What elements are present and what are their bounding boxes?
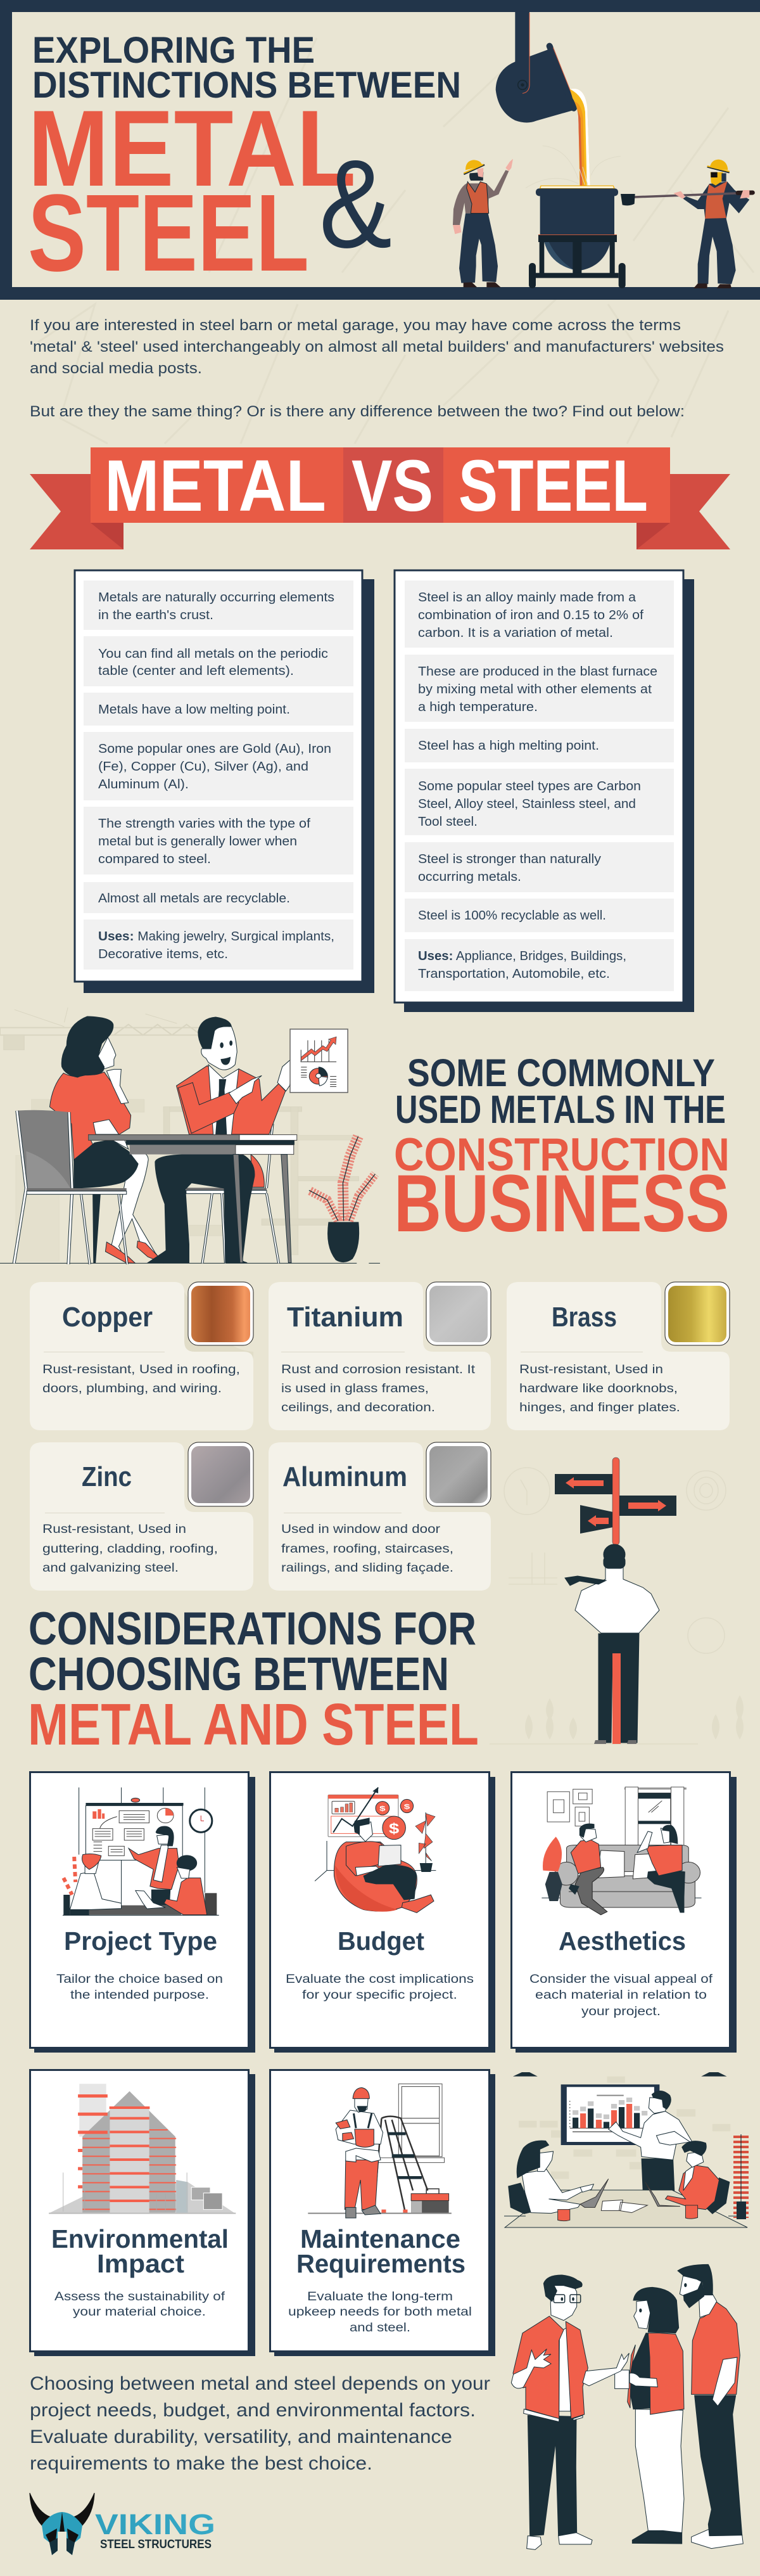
description [288, 2290, 472, 2335]
steel facts: Steel is stronger than naturally [418, 852, 601, 866]
card: brass: Brass [552, 1302, 617, 1333]
card: zinc: and galvanizing steel. [42, 1561, 179, 1575]
card: titanium: ceilings, and decoration. [281, 1401, 435, 1414]
card: project type [30, 1772, 255, 2053]
steel facts: a high temperature. [418, 700, 538, 714]
icon: man on beanbag: $ [379, 1805, 386, 1812]
steel facts: carbon. It is a variation of metal. [418, 626, 613, 640]
heading: commonly used metals [394, 1051, 730, 1249]
table [89, 1135, 297, 1263]
illustration: business meeting [0, 1008, 380, 1264]
metal facts: You can find all metals on the periodic [98, 647, 328, 661]
intro paragraph: If you are interested in steel barn or metal garage, you may have come across the terms [30, 317, 681, 334]
woman's chair [14, 1110, 127, 1264]
icon: viking helmet [30, 2493, 94, 2555]
card: aluminum: railings, and sliding façade. [281, 1561, 453, 1575]
intro text: 'metal' & 'steel' used interchangeably on almost all metal builders' and manufacturers' websites [30, 338, 724, 356]
presentation board [561, 2084, 659, 2145]
card: copper [30, 1282, 253, 1430]
description [529, 1973, 713, 2018]
metal facts: Uses: Making jewelry, Surgical implants, [98, 930, 334, 944]
office plant [737, 2134, 746, 2219]
description: Assess the sustainability of [54, 2290, 225, 2304]
title: Requirements [296, 2249, 466, 2278]
metal facts: (Fe), Copper (Cu), Silver (Ag), and [98, 760, 308, 774]
man [148, 1017, 293, 1263]
conclusion text: project needs, budget, and environmental factors. [30, 2400, 476, 2421]
heading line 1: SOME COMMONLY [407, 1051, 715, 1094]
potted plant [309, 1136, 375, 1262]
card: titanium: Titanium [287, 1302, 403, 1333]
icon: green building [49, 2084, 236, 2214]
banner: metal vs steel [30, 445, 730, 549]
metal facts: in the earth's crust. [98, 608, 213, 622]
metal facts: Almost all metals are recyclable. [98, 892, 290, 906]
man with beard [678, 2264, 743, 2549]
card: aluminum: Used in window and door [281, 1523, 441, 1536]
card: maintenance requirements [270, 2070, 495, 2356]
description: and steel. [350, 2321, 410, 2335]
conclusion text: Choosing between metal and steel depends on your [30, 2373, 490, 2394]
worker pointing [453, 159, 513, 287]
title METAL: METAL [28, 88, 356, 209]
conclusion text [30, 2373, 490, 2474]
card: aluminum [269, 1442, 491, 1591]
faint decorations [490, 1468, 726, 1744]
header illustration: steel pouring [453, 11, 752, 288]
intro question: But are they the same thing? Or is there any difference between the two? Find out below: [30, 403, 685, 420]
wordmark: VIKING [95, 2508, 215, 2541]
card: budget [270, 1772, 495, 2053]
steel facts: Transportation, Automobile, etc. [418, 967, 610, 981]
metal facts: Metals have a low melting point. [98, 703, 290, 717]
title [28, 30, 461, 294]
metal facts: metal but is generally lower when [98, 835, 297, 849]
panel: steel [395, 570, 694, 1012]
illustration: man at signpost [490, 1458, 744, 1744]
header frame [0, 0, 760, 300]
metal facts: compared to steel. [98, 852, 211, 866]
standing presenter [609, 2091, 692, 2191]
illustration: three colleagues [511, 2264, 743, 2549]
description: Evaluate the long-term [307, 2290, 453, 2304]
metal facts: Decorative items, etc. [98, 947, 228, 961]
card: brass [507, 1282, 730, 1430]
floor line [0, 1262, 380, 1264]
icon: project meeting [63, 1788, 219, 1915]
chart board [290, 1029, 348, 1093]
description: Consider the visual appeal of [529, 1973, 713, 1986]
intro text: and social media posts. [30, 360, 202, 377]
seated woman [509, 2141, 593, 2214]
ampersand: & [319, 134, 392, 274]
title: Project Type [64, 1926, 217, 1956]
card: copper: Rust-resistant, Used in roofing, [42, 1363, 240, 1376]
card: zinc: Rust-resistant, Used in [42, 1523, 186, 1536]
card: titanium: is used in glass frames, [281, 1382, 429, 1395]
banner text: STEEL [459, 445, 648, 527]
logo: viking steel structures [30, 2493, 215, 2555]
ladle [496, 11, 576, 123]
illustration: office meeting [505, 2072, 747, 2227]
title [51, 2224, 229, 2278]
lamps [513, 2072, 727, 2077]
card: copper: doors, plumbing, and wiring. [42, 1382, 222, 1395]
heading line 3: METAL AND STEEL [28, 1691, 479, 1757]
card: aesthetics [512, 1772, 737, 2053]
banner text: METAL [104, 445, 326, 527]
steel facts: combination of iron and 0.15 to 2% of [418, 608, 643, 622]
description [286, 1973, 474, 2002]
metal facts [98, 591, 334, 961]
card: environmental impact [30, 2070, 255, 2356]
card: titanium: Rust and corrosion resistant. It [281, 1363, 476, 1376]
molten metal stream [526, 89, 621, 188]
card: aluminum: frames, roofing, staircases, [281, 1542, 453, 1556]
ribbon body [91, 447, 670, 523]
metal facts: Metals are naturally occurring elements [98, 591, 334, 605]
steel facts: Steel is an alloy mainly made from a [418, 591, 636, 605]
description: the intended purpose. [70, 1989, 209, 2002]
steel facts [418, 591, 657, 981]
title: Impact [97, 2249, 184, 2278]
card: zinc: Zinc [82, 1461, 132, 1492]
steel facts: Uses: Appliance, Bridges, Buildings, [418, 949, 626, 963]
crucible on cart [529, 186, 626, 288]
icon: man on beanbag: $ [404, 1802, 410, 1810]
banner text [104, 445, 648, 527]
card: aluminum: Aluminum [282, 1461, 407, 1492]
description [54, 2290, 225, 2319]
title STEEL: STEEL [28, 171, 309, 294]
title: Maintenance [300, 2224, 460, 2253]
wall bricks [519, 2077, 730, 2179]
seated man [666, 2141, 730, 2214]
conclusion text: requirements to make the best choice. [30, 2453, 372, 2474]
steel facts: These are produced in the blast furnace [418, 665, 657, 679]
steel facts: Steel has a high melting point. [418, 739, 599, 753]
description: Tailor the choice based on [56, 1973, 223, 1986]
steel facts: by mixing metal with other elements at [418, 682, 652, 696]
description: upkeep needs for both metal [288, 2305, 472, 2319]
signpost [555, 1458, 676, 1545]
woman with mug [615, 2287, 684, 2544]
icon: man on beanbag [315, 1787, 436, 1913]
background facets [38, 38, 754, 444]
description: your material choice. [73, 2305, 206, 2319]
steel facts: Some popular steel types are Carbon [418, 779, 641, 793]
card: zinc: guttering, cladding, roofing, [42, 1542, 218, 1556]
metal facts: Some popular ones are Gold (Au), Iron [98, 742, 331, 756]
panel: metal [75, 570, 374, 993]
description: your project. [581, 2005, 661, 2018]
icon: man on beanbag: $ [389, 1820, 399, 1836]
card: copper: Copper [62, 1302, 153, 1333]
heading line 3: CONSTRUCTION [394, 1129, 730, 1181]
faint plants [525, 1695, 744, 1740]
man from behind [565, 1544, 659, 1744]
description: for your specific project. [302, 1989, 457, 2002]
card: brass: hardware like doorknobs, [519, 1382, 678, 1395]
tagline: STEEL STRUCTURES [100, 2538, 212, 2551]
floor line for office [504, 2215, 745, 2217]
description: Evaluate the cost implications [286, 1973, 474, 1986]
title: Budget [338, 1926, 424, 1956]
heading line 2: CHOOSING BETWEEN [28, 1648, 449, 1700]
steel facts: Steel is 100% recyclable as well. [418, 909, 606, 923]
title line 1: EXPLORING THE [32, 30, 315, 71]
heading: considerations [28, 1603, 479, 1757]
metal facts: table (center and left elements). [98, 664, 294, 678]
ribbon tails [30, 474, 730, 549]
heading line 1: CONSIDERATIONS FOR [28, 1603, 476, 1655]
intro text [30, 317, 724, 420]
conclusion text: Evaluate durability, versatility, and maintenance [30, 2426, 452, 2447]
steel facts: occurring metals. [418, 870, 521, 884]
title line 2: DISTINCTIONS BETWEEN [32, 65, 461, 106]
description [56, 1973, 223, 2002]
icon: couple on sofa [542, 1787, 702, 1915]
metal facts: Aluminum (Al). [98, 778, 189, 791]
card: titanium [269, 1282, 491, 1430]
man with glasses [511, 2275, 629, 2549]
steel facts: Tool steel. [418, 815, 478, 829]
woman [49, 1016, 163, 1263]
description: each material in relation to [535, 1989, 707, 2002]
card: zinc [30, 1442, 253, 1591]
laptops and papers [558, 2179, 698, 2221]
icon: maintenance worker with ladder [308, 2084, 452, 2218]
faint construction backdrop [0, 1008, 358, 1261]
card: brass: Rust-resistant, Used in [519, 1363, 663, 1376]
title [296, 2224, 466, 2278]
steel facts: Steel, Alloy steel, Stainless steel, and [418, 797, 636, 811]
banner text: VS [352, 445, 433, 527]
man's chair [186, 1124, 279, 1263]
title: Environmental [51, 2224, 229, 2253]
card: brass: hinges, and finger plates. [519, 1401, 680, 1414]
worker with rod [621, 160, 752, 288]
metal facts: The strength varies with the type of [98, 817, 310, 831]
meeting table [505, 2190, 747, 2227]
title: Aesthetics [559, 1926, 686, 1956]
